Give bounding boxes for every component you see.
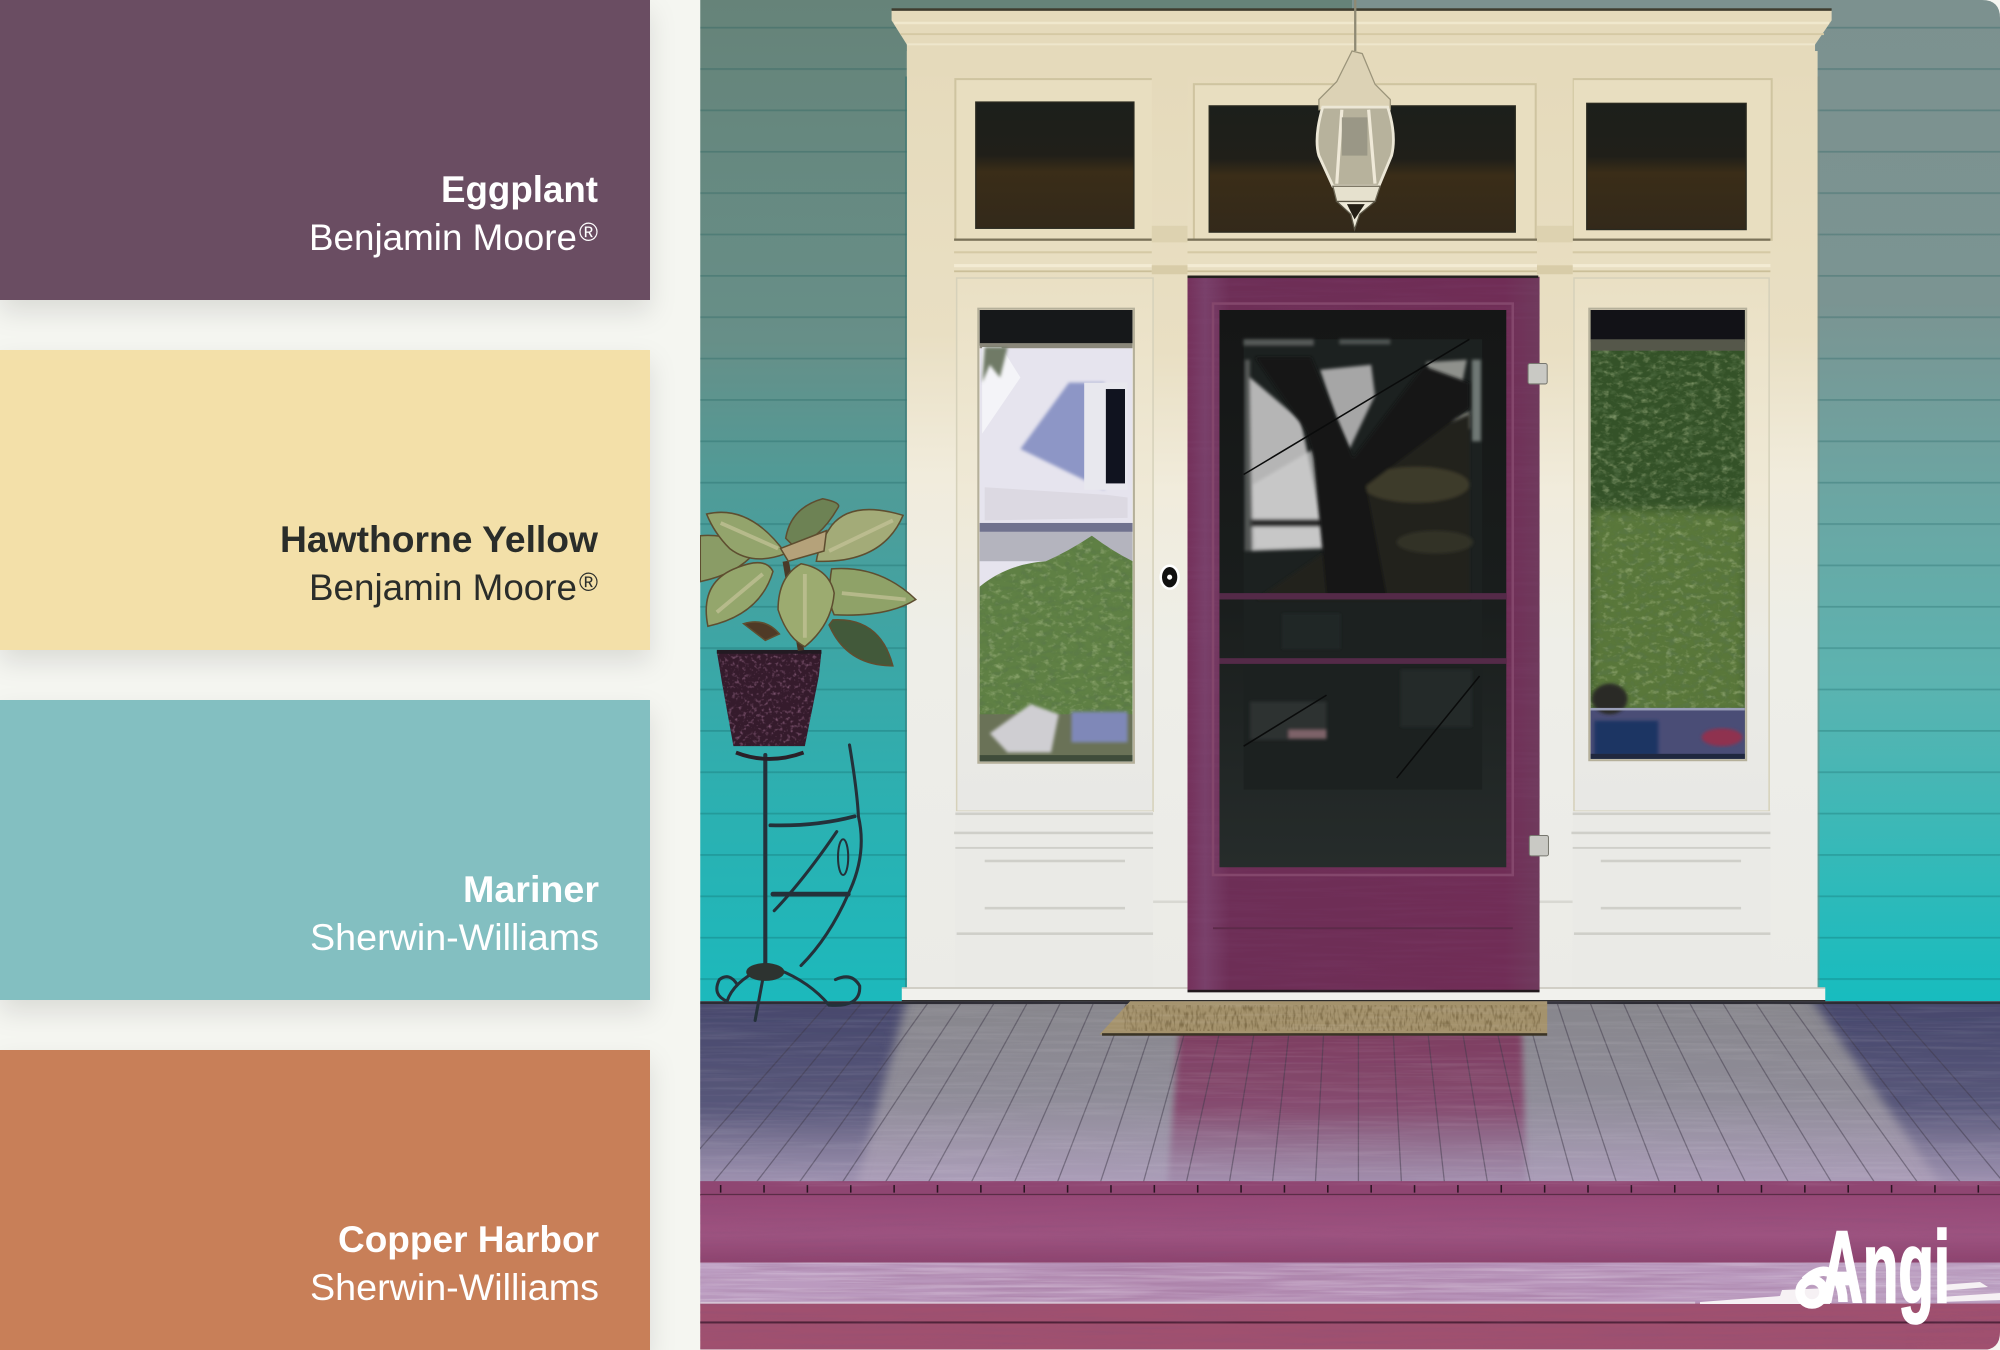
steps xyxy=(700,1001,2000,1349)
horizontal band mouldings xyxy=(954,239,1770,274)
right sidelight window xyxy=(1591,310,1745,759)
screen rails xyxy=(1219,593,1506,664)
door: screen with reflection xyxy=(1219,310,1506,867)
panel: Copper Harbor swatch: Sherwin-Williams xyxy=(310,1267,599,1308)
panel: Hawthorne Yellow swatch xyxy=(0,350,650,650)
Angi logo xyxy=(1800,1212,1950,1324)
purple front door xyxy=(1159,276,1548,992)
porch floor xyxy=(665,995,2000,1199)
potted plant on iron stand xyxy=(700,499,916,1020)
panel: Eggplant swatch: Benjamin Moore xyxy=(309,217,577,258)
panel: Hawthorne Yellow swatch: Benjamin Moore xyxy=(309,567,577,608)
sidelight door panels xyxy=(957,278,1769,811)
hanging lantern xyxy=(1317,0,1393,230)
lower raised panels xyxy=(954,811,1770,935)
reflected tree xyxy=(1250,357,1473,740)
door: inner moulding xyxy=(1213,304,1513,875)
panel: Hawthorne Yellow swatch: ® xyxy=(579,567,598,597)
screen tear lines xyxy=(1244,339,1480,778)
panel: Copper Harbor swatch: Copper Harbor xyxy=(338,1219,599,1260)
panel: Eggplant swatch xyxy=(0,0,650,300)
panel: Copper Harbor swatch xyxy=(0,1050,650,1350)
panel: Mariner swatch: Sherwin-Williams xyxy=(310,917,599,958)
threshold plinth xyxy=(902,987,1825,1002)
panel: Mariner swatch: Mariner xyxy=(463,869,599,910)
iron stand xyxy=(717,745,861,1020)
door: hinges xyxy=(1528,364,1548,856)
panel: Hawthorne Yellow swatch: Hawthorne Yellow xyxy=(280,519,598,560)
leaves xyxy=(700,499,916,666)
transom windows xyxy=(976,102,1746,232)
cornice xyxy=(892,8,1832,77)
transom recess frames xyxy=(955,79,1772,240)
floor: dark purple sides xyxy=(689,995,2000,1199)
door mat xyxy=(1099,1001,1547,1036)
photo: front porch with painted door xyxy=(665,0,2000,1349)
pot xyxy=(717,652,821,759)
wall siding xyxy=(700,0,2000,1001)
window frame outlines xyxy=(978,309,1746,763)
centre pilasters xyxy=(1152,78,1573,903)
floor: planks xyxy=(665,1004,2000,1189)
door surround trim xyxy=(892,8,1832,1002)
riser 2 xyxy=(700,1304,2000,1349)
reflected sky xyxy=(1244,339,1481,551)
panel: Mariner swatch xyxy=(0,700,650,1000)
left sidelight window xyxy=(980,310,1133,761)
panel: Eggplant swatch: ® xyxy=(579,217,598,247)
floor: pink centre patch xyxy=(1167,1027,1527,1189)
tread xyxy=(700,1263,2000,1304)
riser 1 xyxy=(700,1195,2000,1263)
door: keyhole xyxy=(1159,564,1180,590)
colour swatch column xyxy=(0,0,650,1350)
panel: Eggplant swatch: Eggplant xyxy=(441,169,598,210)
logo highlight strokes on step xyxy=(1700,1282,2000,1304)
